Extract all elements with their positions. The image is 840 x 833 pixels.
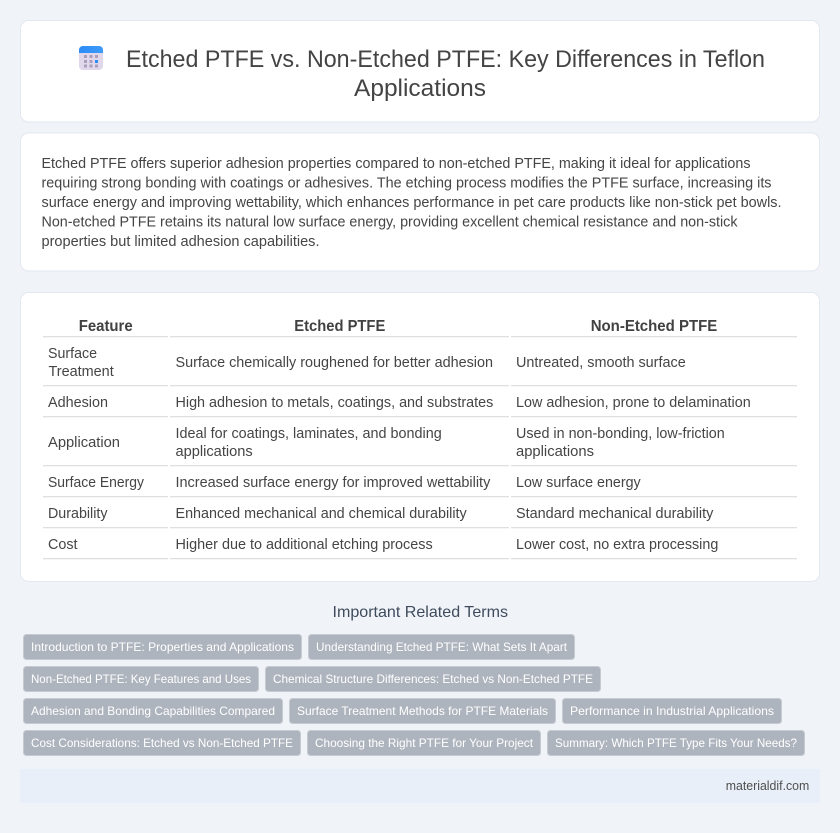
title: Applications bbox=[354, 75, 486, 102]
row: cost: Higher due to additional etching process bbox=[176, 537, 433, 553]
tag bbox=[562, 698, 782, 724]
tag bbox=[24, 666, 258, 692]
row: surface treatment: Surface bbox=[48, 346, 97, 362]
intro paragraph bbox=[42, 156, 782, 250]
row: surface energy: Increased surface energy for improved wettability bbox=[176, 475, 491, 491]
intro paragraph: properties but limited adhesion capabilities. bbox=[42, 234, 320, 250]
title bbox=[126, 46, 765, 102]
intro paragraph: requiring strong bonding with coatings or adhesives. The etching process modifies the PTFE surface, increasing its bbox=[42, 175, 772, 191]
tag: Non-Etched PTFE: Key Features and Uses bbox=[31, 672, 251, 686]
panel: comparison table bbox=[20, 292, 820, 582]
row: application: Ideal for coatings, laminates, and bonding bbox=[176, 426, 442, 442]
table header row bbox=[79, 318, 717, 335]
panel: introduction bbox=[20, 133, 820, 271]
row: surface energy: Surface Energy bbox=[48, 475, 145, 491]
icon: calendar bbox=[79, 46, 103, 70]
tag bbox=[308, 730, 540, 756]
tag bbox=[266, 666, 600, 692]
title: Etched PTFE vs. Non-Etched PTFE: Key Differences in Teflon bbox=[126, 46, 765, 73]
row: application: applications bbox=[516, 444, 594, 460]
row: application: applications bbox=[176, 444, 253, 460]
tag: Performance in Industrial Applications bbox=[570, 704, 774, 718]
table header row: Feature bbox=[79, 318, 133, 335]
row: application bbox=[48, 426, 725, 460]
table header row: Non-Etched PTFE bbox=[591, 318, 717, 335]
row: durability: Enhanced mechanical and chemical durability bbox=[176, 506, 467, 522]
tag bbox=[290, 698, 556, 724]
tag bbox=[24, 698, 282, 724]
tag: Cost Considerations: Etched vs Non-Etched PTFE bbox=[31, 736, 293, 750]
row: adhesion: Low adhesion, prone to delamination bbox=[516, 395, 751, 411]
intro paragraph: Etched PTFE offers superior adhesion properties compared to non-etched PTFE, making it ideal for applications bbox=[42, 156, 750, 172]
heading: important related terms: Important Related Terms bbox=[332, 604, 508, 621]
tag: Summary: Which PTFE Type Fits Your Needs? bbox=[555, 736, 797, 750]
row: adhesion bbox=[48, 395, 751, 411]
intro paragraph: surface energy and improving wettability, which enhances performance in pet care products like non-stick pet bowls. bbox=[42, 195, 782, 211]
row: application: Used in non-bonding, low-friction bbox=[516, 426, 725, 442]
row: cost: Cost bbox=[48, 537, 78, 553]
tag bbox=[308, 634, 574, 660]
tag: Surface Treatment Methods for PTFE Materials bbox=[297, 704, 548, 718]
row: surface treatment: Surface chemically roughened for better adhesion bbox=[176, 355, 493, 371]
row: surface treatment: Untreated, smooth surface bbox=[516, 355, 686, 371]
row: surface energy bbox=[48, 475, 641, 491]
tag bbox=[24, 730, 300, 756]
row: adhesion: High adhesion to metals, coatings, and substrates bbox=[176, 395, 493, 411]
row: adhesion: Adhesion bbox=[48, 395, 108, 411]
table header row: Etched PTFE bbox=[294, 318, 385, 335]
row: durability: Durability bbox=[48, 506, 108, 522]
row: durability bbox=[48, 506, 714, 522]
tag: Chemical Structure Differences: Etched vs Non-Etched PTFE bbox=[273, 672, 593, 686]
row: surface treatment bbox=[48, 346, 686, 380]
tag: Adhesion and Bonding Capabilities Compared bbox=[31, 704, 275, 718]
row: cost bbox=[48, 537, 718, 553]
intro paragraph: Non-etched PTFE retains its natural low surface energy, providing excellent chemical resistance and non-stick bbox=[42, 214, 738, 230]
footer bar: materialdif.com bbox=[726, 778, 809, 793]
row: durability: Standard mechanical durability bbox=[516, 506, 714, 522]
tag bbox=[24, 634, 302, 660]
row: surface treatment: Treatment bbox=[48, 364, 114, 380]
row: surface energy: Low surface energy bbox=[516, 475, 641, 491]
related term tags bbox=[24, 634, 804, 756]
tag: Choosing the Right PTFE for Your Project bbox=[315, 736, 534, 750]
tag: Understanding Etched PTFE: What Sets It Apart bbox=[316, 640, 568, 654]
row: cost: Lower cost, no extra processing bbox=[516, 537, 718, 553]
header panel bbox=[20, 20, 820, 122]
tag bbox=[548, 730, 804, 756]
row: application: Application bbox=[48, 435, 120, 451]
tag: Introduction to PTFE: Properties and Applications bbox=[31, 640, 294, 654]
footer bar bbox=[20, 769, 820, 803]
